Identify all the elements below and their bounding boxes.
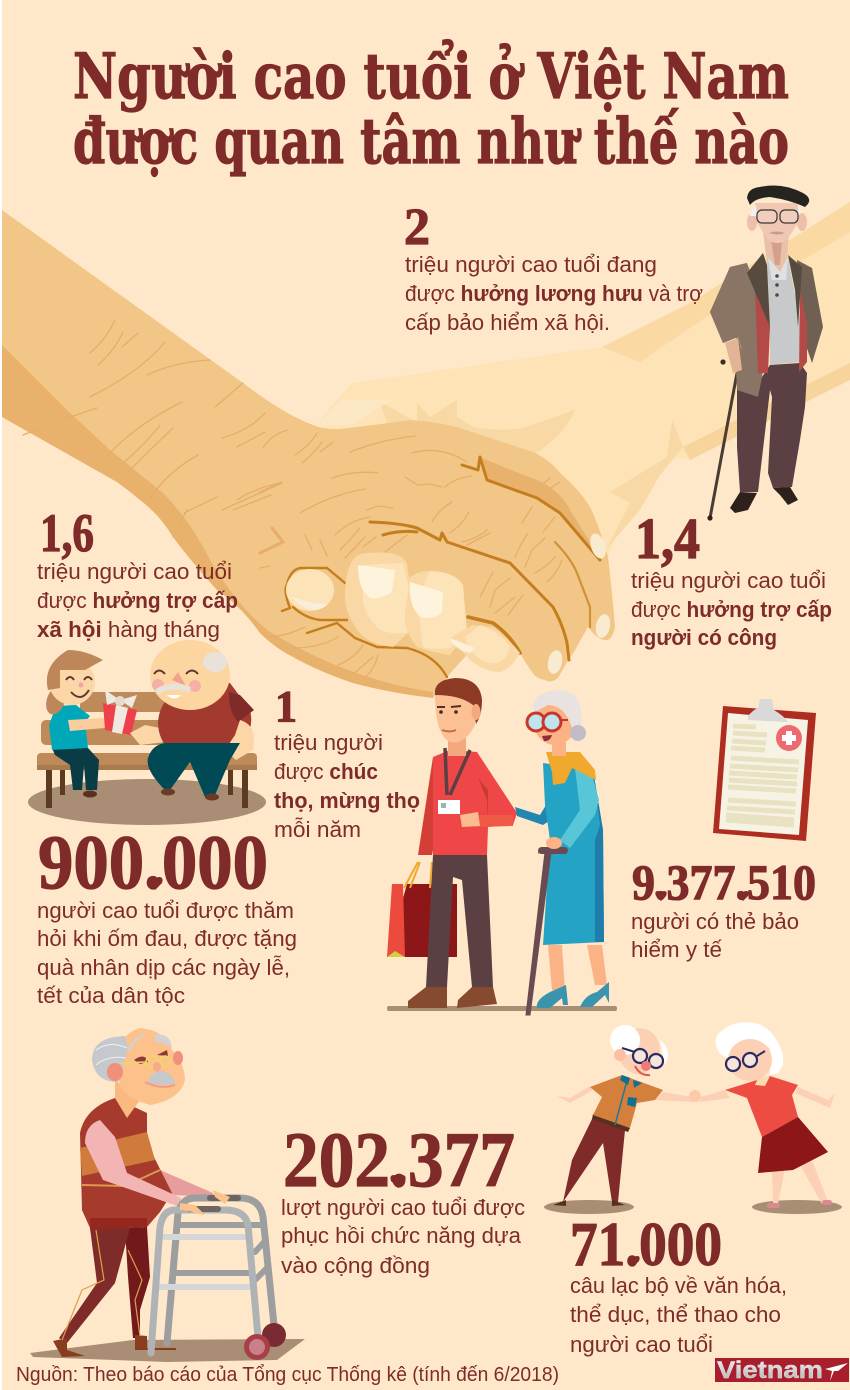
stat: 202.377 rehabilitation: 202.377 bbox=[283, 1116, 515, 1203]
stat: 2 million pensions bbox=[404, 199, 703, 335]
stat: 1,4 million merit allowance: được hưởng trợ cấp bbox=[631, 597, 832, 622]
icon: medical clipboard bbox=[713, 699, 816, 841]
finger creases bbox=[282, 457, 600, 677]
stat: 71.000 clubs: thể dục, thể thao cho bbox=[570, 1302, 781, 1327]
stat: 9.377.510 insurance cards: người có thẻ bảo bbox=[631, 909, 799, 934]
stat: 202.377 rehabilitation bbox=[281, 1116, 525, 1278]
stat: 202.377 rehabilitation: lượt người cao tuổi được bbox=[281, 1195, 525, 1220]
stat: 1,4 million merit allowance: triệu người cao tuổi bbox=[631, 568, 826, 593]
stat: 71.000 clubs: 71.000 bbox=[570, 1211, 722, 1279]
stat: 900.000 visited: tết của dân tộc bbox=[37, 983, 185, 1008]
stat: 1,6 million social allowance: được hưởng trợ cấp bbox=[37, 588, 238, 613]
stat: 202.377 rehabilitation: phục hồi chức năng dựa bbox=[281, 1223, 522, 1248]
stat: 1,4 million merit allowance: người có công bbox=[631, 625, 777, 650]
logo: Vietnam+ bbox=[715, 1357, 849, 1384]
stat: 2 million pensions: cấp bảo hiểm xã hội. bbox=[405, 310, 610, 335]
stat: 1,6 million social allowance: 1,6 bbox=[40, 503, 94, 563]
illustration: clasped hands bbox=[2, 202, 850, 698]
stat: 202.377 rehabilitation: vào cộng đồng bbox=[281, 1253, 430, 1278]
logo: Vietnam+: Vietnam bbox=[717, 1357, 823, 1384]
stat: 900.000 visited: người cao tuổi được thăm bbox=[37, 898, 294, 923]
stat: 2 million pensions: triệu người cao tuổi đang bbox=[405, 252, 657, 277]
illustration: caregiver with elderly woman bbox=[387, 678, 617, 1015]
stat: 9.377.510 insurance cards: 9.377.510 bbox=[632, 854, 816, 910]
stat: 900.000 visited: hỏi khi ốm đau, được tặng bbox=[37, 926, 297, 951]
stat: 1 million longevity celebrations: 1 bbox=[275, 682, 297, 731]
illustration: old man with cane bbox=[707, 185, 823, 521]
stat: 9.377.510 insurance cards: hiểm y tế bbox=[631, 937, 722, 962]
stat: 900.000 visited: 900.000 bbox=[38, 819, 268, 905]
heart separators bbox=[655, 891, 749, 901]
stat: 2 million pensions: 2 bbox=[404, 199, 430, 256]
fingers bbox=[286, 531, 612, 675]
stat: 1 million longevity celebrations: triệu người bbox=[274, 730, 383, 755]
stat: 9.377.510 insurance cards bbox=[631, 854, 816, 962]
stat: 71.000 clubs: người cao tuổi bbox=[570, 1332, 713, 1357]
wrinkles bbox=[23, 320, 562, 678]
stat: 71.000 clubs: câu lạc bộ về văn hóa, bbox=[570, 1273, 787, 1298]
stat: 900.000 visited: quà nhân dịp các ngày lễ, bbox=[37, 955, 290, 980]
heart separator bbox=[628, 1256, 640, 1266]
stat: 2 million pensions: được hưởng lương hưu và trợ bbox=[405, 281, 703, 306]
stat: 1 million longevity celebrations: thọ, mừng thọ bbox=[274, 788, 420, 813]
illustration: elderly couple dancing bbox=[544, 1022, 842, 1214]
stat: 1 million longevity celebrations bbox=[274, 682, 420, 842]
illustration: boy giving gift to grandfather on bench bbox=[28, 640, 266, 825]
illustration: elderly man with walker bbox=[30, 1028, 305, 1362]
stat: 1,4 million merit allowance bbox=[631, 506, 832, 650]
stat: 1,6 million social allowance: triệu người cao tuổi bbox=[37, 559, 232, 584]
stat: 71.000 clubs bbox=[570, 1211, 787, 1357]
heart separator bbox=[147, 877, 163, 890]
source note: Nguồn: Theo báo cáo của Tổng cục Thống kê (tính đến 6/2018) bbox=[16, 1364, 559, 1386]
stat: 900.000 visited bbox=[37, 819, 297, 1008]
stat: 1,6 million social allowance bbox=[37, 503, 238, 642]
stat: 1 million longevity celebrations: mỗi năm bbox=[274, 817, 361, 842]
stat: 1 million longevity celebrations: được chúc bbox=[274, 759, 378, 784]
stat: 1,6 million social allowance: xã hội hàng tháng bbox=[37, 617, 220, 642]
stat: 1,4 million merit allowance: 1,4 bbox=[635, 506, 700, 571]
heart separator bbox=[390, 1175, 406, 1188]
title bbox=[73, 38, 789, 178]
